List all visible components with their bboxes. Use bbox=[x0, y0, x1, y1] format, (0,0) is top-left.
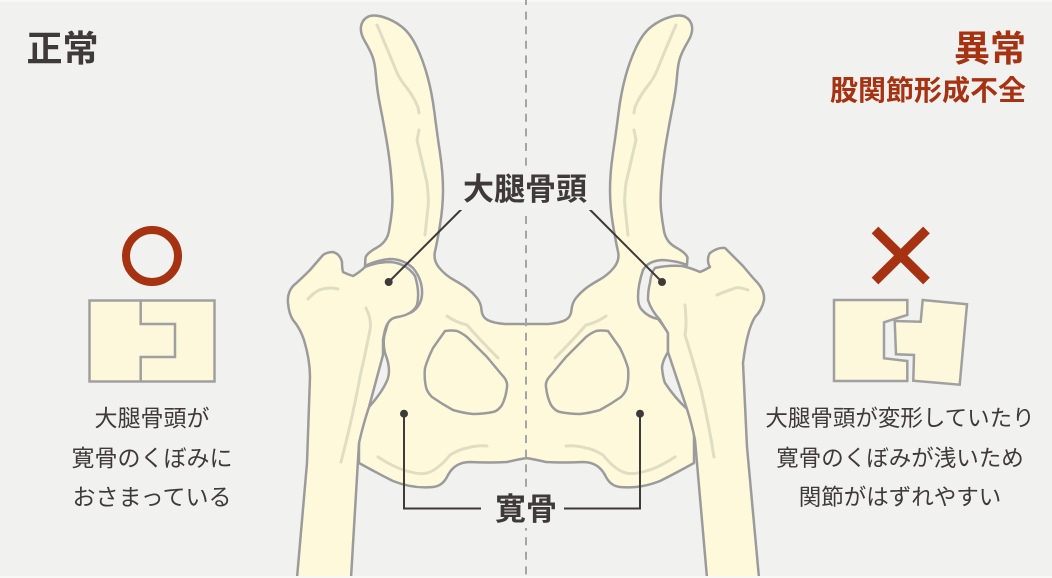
icon: circle mark bbox=[126, 230, 178, 282]
pelvis: left half (normal) bbox=[359, 16, 527, 487]
text: normal description: おさまっている bbox=[73, 484, 231, 510]
leader lines: femoral head bbox=[385, 208, 666, 286]
text: normal description: 寛骨のくぼみに bbox=[72, 445, 232, 471]
center dashed divider bbox=[525, 0, 527, 576]
bone shading lines bbox=[308, 25, 748, 474]
text: abnormal description bbox=[765, 406, 1035, 510]
femur: right bbox=[648, 248, 764, 578]
text: abnormal description: 寛骨のくぼみが浅いため bbox=[776, 446, 1024, 471]
text: abnormal description: 大腿骨頭が変形していたり bbox=[765, 406, 1035, 431]
text: normal description bbox=[72, 405, 232, 510]
pelvis: right half (dysplasia) bbox=[526, 16, 694, 487]
icon: cross mark bbox=[875, 230, 926, 281]
icon: dislocated joint diagram bbox=[834, 300, 967, 385]
heading: abnormal: 異常 bbox=[954, 28, 1026, 69]
leader lines: hip bone bbox=[400, 410, 644, 508]
pelvis and femur illustration bbox=[288, 16, 764, 578]
text: abnormal description: 関節がはずれやすい bbox=[799, 485, 1001, 510]
text: normal description: 大腿骨頭が bbox=[94, 405, 210, 431]
subheading: hip dysplasia: 股関節形成不全 bbox=[830, 75, 1026, 106]
femur: left bbox=[288, 252, 418, 578]
label: hip bone: 寛骨 bbox=[495, 492, 557, 527]
label: femoral head: 大腿骨頭 bbox=[463, 172, 587, 207]
icon: normal joint diagram bbox=[90, 300, 214, 382]
heading: normal: 正常 bbox=[26, 28, 99, 69]
